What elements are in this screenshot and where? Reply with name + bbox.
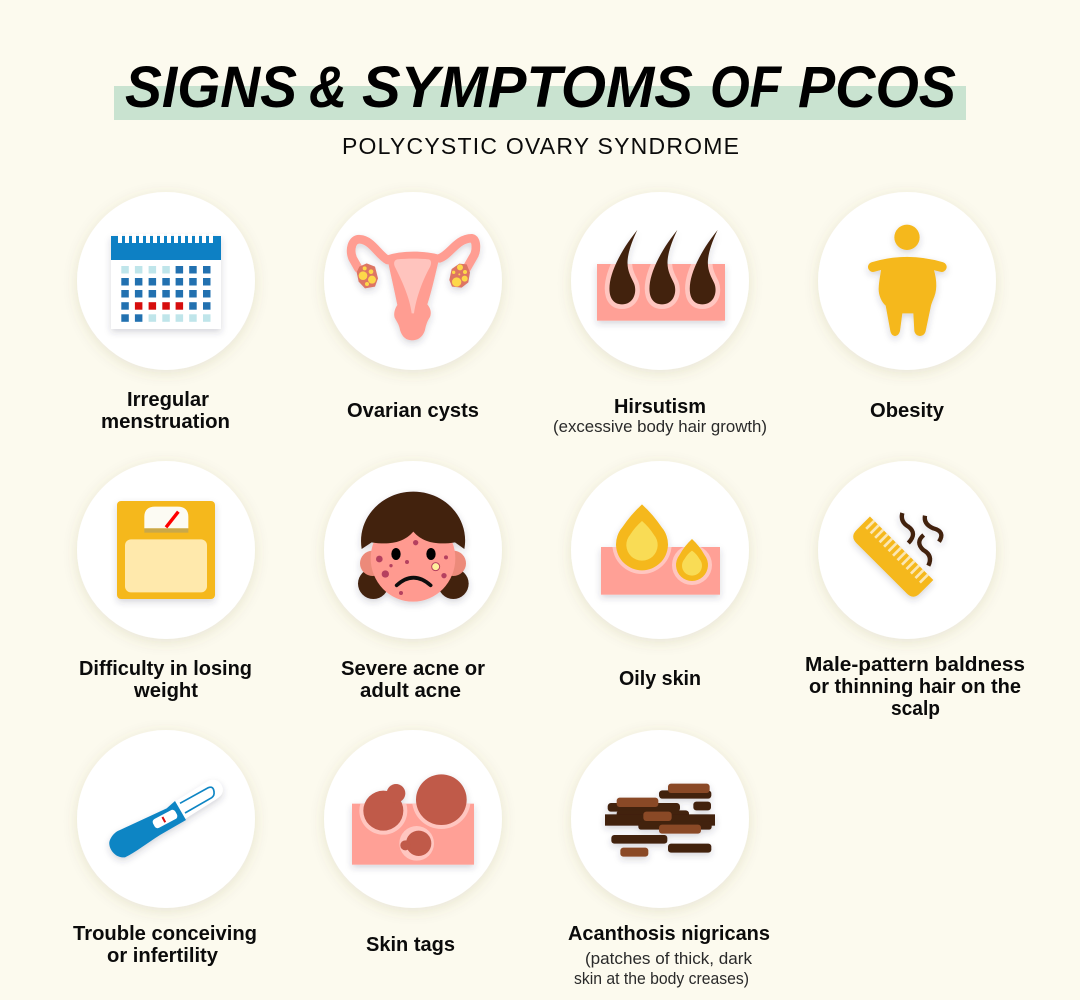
label — [341, 658, 485, 702]
label: (excessive body hair growth) — [553, 417, 767, 436]
icon: comb with hair — [850, 513, 941, 600]
label: or thinning hair on the — [809, 676, 1021, 698]
label — [553, 396, 767, 436]
icon: calendar — [111, 234, 221, 329]
panel: male-pattern baldness — [805, 461, 1025, 720]
label: Irregular — [127, 389, 209, 411]
label: or infertility — [107, 945, 219, 967]
label: Obesity — [870, 400, 945, 422]
panel: oily skin — [571, 461, 749, 690]
label: menstruation — [101, 411, 230, 433]
title: SYMPTOMS — [362, 55, 693, 120]
icon: uterus and ovaries — [351, 238, 476, 340]
label: Severe acne or — [341, 658, 485, 680]
panel: irregular menstruation — [77, 192, 255, 433]
title: OF — [710, 55, 782, 120]
label — [73, 923, 257, 967]
label — [101, 389, 230, 433]
panel: acanthosis nigricans — [568, 730, 770, 988]
label — [79, 658, 252, 702]
label: weight — [133, 680, 198, 702]
icon: oil drops on skin — [601, 504, 720, 595]
label: (patches of thick, dark — [585, 949, 752, 968]
label: Acanthosis nigricans — [568, 923, 770, 945]
panel: trouble conceiving — [73, 730, 257, 967]
panel: severe acne — [324, 461, 502, 702]
label — [805, 654, 1025, 720]
title — [114, 55, 966, 120]
label: Hirsutism — [614, 396, 706, 418]
panel: skin tags — [324, 730, 502, 956]
title: SIGNS — [125, 55, 297, 120]
subtitle: POLYCYSTIC OVARY SYNDROME — [342, 133, 739, 159]
label: Skin tags — [366, 934, 455, 956]
label: Oily skin — [619, 668, 701, 690]
icon: hair follicles — [597, 230, 725, 321]
panel: hirsutism — [553, 192, 767, 436]
label: scalp — [891, 698, 940, 720]
icon: face with acne — [358, 492, 469, 602]
panel: obesity — [818, 192, 996, 422]
title: PCOS — [798, 55, 956, 120]
icon: skin tags — [352, 770, 474, 865]
icon: dark skin patches — [605, 784, 715, 857]
icon: obese figure — [873, 225, 942, 336]
icon: pregnancy test — [109, 780, 223, 857]
title: & — [309, 55, 347, 120]
label: Trouble conceiving — [73, 923, 257, 945]
label: Male-pattern baldness — [805, 654, 1025, 676]
panel: ovarian cysts — [324, 192, 502, 422]
label: Ovarian cysts — [347, 400, 479, 422]
label: Difficulty in losing — [79, 658, 252, 680]
label: adult acne — [360, 680, 461, 702]
icon: weighing scale — [117, 501, 215, 599]
label — [568, 923, 770, 988]
label: skin at the body creases) — [574, 969, 749, 988]
panel: difficulty in losing weight — [77, 461, 255, 702]
